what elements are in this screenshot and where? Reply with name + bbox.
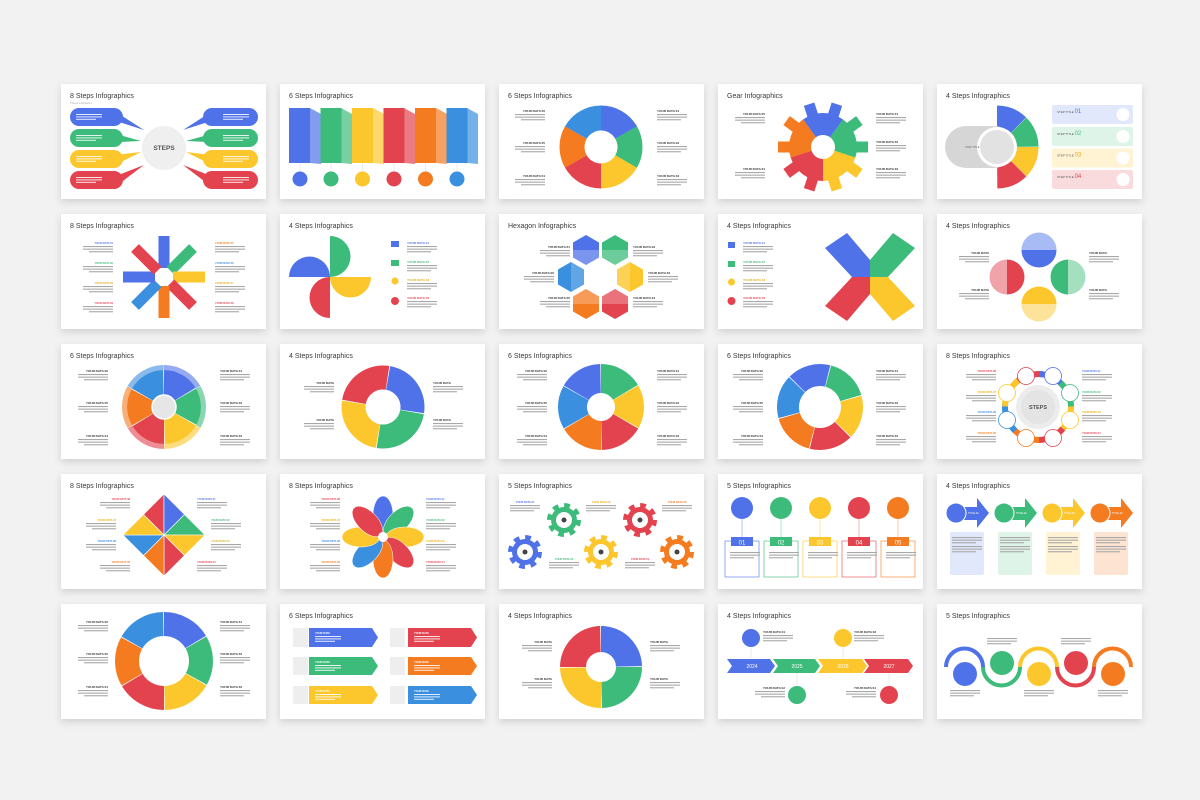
arrows: TITLE 03 — [1064, 511, 1075, 515]
slide 5: 4 steps semicircle with step titles — [937, 84, 1142, 199]
labels: YOUR DATA 04 — [523, 174, 545, 178]
timeline arrows: 2026 — [837, 664, 849, 670]
slide 21: 6 steps ring (no title) — [61, 604, 266, 719]
circles — [990, 232, 1086, 322]
slide 6: 8 steps star bars — [61, 214, 266, 329]
labels: YOUR DATA 01 — [220, 620, 242, 624]
labels: YOUR DATA 05 — [668, 500, 687, 504]
title: 4 Steps Infographics — [508, 613, 572, 620]
numbered boxes: 03 — [817, 540, 824, 546]
labels: YOUR DATA 02 — [1082, 390, 1101, 394]
numbered boxes: 02 — [778, 540, 785, 546]
title: 6 Steps Infographics — [508, 353, 572, 360]
X chart — [825, 233, 915, 321]
step cards: STEP TITLE 04 — [1057, 174, 1082, 180]
labels: YOUR DATA 01 — [516, 500, 535, 504]
labels: YOUR DATA 05 — [111, 560, 131, 564]
labels: YOUR DATA 06 — [97, 539, 117, 543]
labels: YOUR DATA 01 — [763, 630, 785, 634]
slide 15: 8 steps ring with circles — [937, 344, 1142, 459]
labels: YOUR DATA 02 — [876, 140, 898, 144]
numbered boxes: 01 — [739, 540, 746, 546]
shutter ring — [562, 368, 640, 446]
numbered boxes — [725, 537, 915, 577]
labels: YOUR DATA 01 — [876, 112, 898, 116]
labels: YOUR DATA 01 — [426, 497, 445, 501]
labels: YOUR DATA — [971, 288, 990, 292]
labels: YOUR DATA 04 — [741, 434, 763, 438]
labels — [755, 630, 884, 697]
title: 6 Steps Infographics — [289, 613, 353, 620]
slide 19: 5 steps circles with numbered boxes — [718, 474, 923, 589]
center circle — [142, 126, 186, 170]
labels: YOUR DATA 04 — [197, 560, 216, 564]
slide 16: 8 steps diamond — [61, 474, 266, 589]
labels — [310, 497, 456, 571]
slide 4: gear infographics — [718, 84, 923, 199]
wave — [946, 648, 1131, 686]
labels: YOUR DATA 08 — [215, 301, 234, 305]
labels: YOUR DATA 01 — [657, 369, 679, 373]
slide 23: 4 steps ring — [499, 604, 704, 719]
title: 4 Steps Infographics — [946, 93, 1010, 100]
labels: YOUR DATA — [971, 251, 990, 255]
labels: YOUR DATA 01 — [657, 109, 679, 113]
labels: YOUR DATA 01 — [1082, 369, 1101, 373]
hexagons — [558, 235, 643, 319]
labels: YOUR DATA 01 — [94, 241, 114, 245]
labels: YOUR DATA 06 — [525, 369, 547, 373]
list: YOUR DATA 01 — [407, 241, 429, 245]
labels — [733, 369, 906, 445]
banners: YOUR DATA — [414, 631, 429, 635]
labels: YOUR DATA 05 — [525, 401, 547, 405]
labels: YOUR DATA 03 — [657, 174, 679, 178]
title: 6 Steps Infographics — [727, 353, 791, 360]
title: 8 Steps Infographics — [70, 93, 134, 100]
labels: YOUR DATA — [1089, 288, 1108, 292]
labels — [735, 112, 906, 178]
labels: YOUR DATA 02 — [426, 518, 445, 522]
ring segments — [991, 360, 1085, 454]
labels: YOUR DATA 07 — [977, 390, 997, 394]
labels: YOUR DATA 04 — [86, 434, 108, 438]
title: 8 Steps Infographics — [70, 483, 134, 490]
labels: YOUR DATA 04 — [854, 686, 876, 690]
right bubbles — [183, 108, 258, 189]
ring chart — [561, 107, 641, 187]
slide 14: 6 steps ring — [718, 344, 923, 459]
title: 6 Steps Infographics — [70, 353, 134, 360]
step cards: STEP TITLE 02 — [1057, 131, 1082, 137]
banners: YOUR DATA — [414, 660, 429, 664]
labels: YOUR DATA 06 — [86, 620, 108, 624]
labels: YOUR DATA — [534, 677, 553, 681]
title: 4 Steps Infographics — [727, 223, 791, 230]
list: YOUR DATA 02 — [743, 260, 765, 264]
labels: YOUR DATA — [316, 418, 335, 422]
labels: YOUR DATA — [1089, 251, 1108, 255]
slide 3: 6 steps puzzle ring — [499, 84, 704, 199]
labels: YOUR DATA 05 — [977, 431, 997, 435]
labels: YOUR DATA 02 — [657, 141, 679, 145]
list: YOUR DATA 03 — [407, 278, 429, 282]
center circle: STEPS — [153, 145, 175, 152]
list — [728, 241, 773, 307]
labels: YOUR DATA 04 — [633, 296, 655, 300]
labels: YOUR DATA 03 — [876, 434, 898, 438]
labels: YOUR DATA 01 — [876, 369, 898, 373]
labels: YOUR DATA 02 — [555, 557, 574, 561]
step cards — [1052, 105, 1133, 189]
labels: YOUR DATA 02 — [633, 245, 655, 249]
step cards: STEP TITLE 03 — [1057, 152, 1082, 158]
list — [391, 241, 437, 307]
gray pill: STEP TITLE — [965, 145, 980, 149]
star bars — [123, 236, 205, 318]
step circles — [292, 163, 464, 186]
labels: YOUR DATA 04 — [525, 434, 547, 438]
labels: YOUR DATA 04 — [743, 167, 765, 171]
pinwheel — [289, 236, 371, 318]
banners: YOUR DATA — [315, 660, 330, 664]
list: YOUR DATA 02 — [407, 260, 429, 264]
labels: YOUR DATA 05 — [321, 560, 341, 564]
step circles — [953, 651, 1125, 686]
title: 4 Steps Infographics — [289, 223, 353, 230]
labels: YOUR DATA — [650, 677, 669, 681]
arrows — [946, 498, 1133, 528]
labels: YOUR DATA 01 — [220, 369, 242, 373]
title: 8 Steps Infographics — [289, 483, 353, 490]
labels — [522, 640, 680, 688]
slide 1: 8 steps speech bubbles — [61, 84, 266, 199]
step cards: STEP TITLE 01 — [1057, 109, 1082, 115]
labels — [304, 381, 463, 429]
slide 1: 8 steps speech bubbles: 8 Steps Infographics — [70, 102, 93, 105]
labels: YOUR DATA 02 — [657, 401, 679, 405]
labels: YOUR DATA 04 — [86, 685, 108, 689]
pie chart — [110, 353, 218, 461]
labels: YOUR DATA 05 — [743, 112, 765, 116]
step circles — [998, 368, 1078, 446]
banners — [289, 108, 478, 164]
labels: YOUR DATA 06 — [977, 410, 997, 414]
labels: YOUR DATA 07 — [321, 518, 341, 522]
labels: YOUR DATA 06 — [86, 369, 108, 373]
gears — [511, 506, 691, 566]
timeline arrows — [727, 659, 913, 673]
title: 8 Steps Infographics — [946, 353, 1010, 360]
labels: YOUR DATA 04 — [94, 301, 114, 305]
gear — [778, 103, 868, 191]
labels — [78, 620, 250, 696]
labels: YOUR DATA 07 — [215, 281, 234, 285]
labels: YOUR DATA — [534, 640, 553, 644]
labels: YOUR DATA 02 — [220, 401, 242, 405]
labels: YOUR DATA 02 — [211, 518, 230, 522]
labels: YOUR DATA 03 — [220, 434, 242, 438]
title: 8 Steps Infographics — [70, 223, 134, 230]
timeline arrows: 2025 — [791, 664, 803, 670]
labels: YOUR DATA 02 — [876, 401, 898, 405]
labels — [959, 251, 1119, 299]
numbered boxes: 05 — [895, 540, 902, 546]
labels — [515, 109, 687, 185]
timeline arrows: 2024 — [746, 664, 758, 670]
labels: YOUR DATA 03 — [94, 281, 114, 285]
labels: YOUR DATA 04 — [1082, 431, 1101, 435]
slide 22: 6 steps arrow banners — [280, 604, 485, 719]
labels: YOUR DATA 03 — [657, 434, 679, 438]
labels: YOUR DATA 06 — [523, 109, 545, 113]
flower — [342, 496, 424, 578]
labels: YOUR DATA 03 — [211, 539, 230, 543]
title: 6 Steps Infographics — [289, 93, 353, 100]
labels: YOUR DATA 07 — [97, 518, 117, 522]
labels: YOUR DATA 08 — [977, 369, 997, 373]
slide 2: 6 steps folded banners — [280, 84, 485, 199]
labels — [83, 241, 245, 312]
list: YOUR DATA 04 — [407, 296, 429, 300]
title: 4 Steps Infographics — [289, 353, 353, 360]
arrows: TITLE 04 — [1112, 511, 1123, 515]
banners: YOUR DATA — [315, 689, 330, 693]
labels: YOUR DATA 06 — [215, 261, 234, 265]
donut — [349, 373, 417, 441]
labels — [78, 369, 250, 445]
semicircle — [968, 118, 1026, 176]
labels — [524, 245, 678, 307]
center STEPS: STEPS — [1029, 405, 1047, 411]
title: 5 Steps Infographics — [946, 613, 1010, 620]
title: 6 Steps Infographics — [508, 93, 572, 100]
banners: YOUR DATA — [315, 631, 330, 635]
slide 13: 6 steps shutter — [499, 344, 704, 459]
list: YOUR DATA 01 — [743, 241, 765, 245]
labels: YOUR DATA 03 — [592, 500, 611, 504]
numbered boxes: 04 — [856, 540, 863, 546]
labels: YOUR DATA 03 — [854, 630, 876, 634]
labels: YOUR DATA 05 — [523, 141, 545, 145]
labels: YOUR DATA — [316, 381, 335, 385]
slide 18: 5 steps gears — [499, 474, 704, 589]
labels: YOUR DATA 03 — [876, 167, 898, 171]
ring — [113, 610, 215, 712]
slide 12: 4 steps donut — [280, 344, 485, 459]
labels: YOUR DATA — [650, 640, 669, 644]
texts — [950, 638, 1128, 696]
ring — [573, 639, 629, 695]
diamond — [123, 494, 205, 576]
title: 4 Steps Infographics — [727, 613, 791, 620]
slide 17: 8 steps flower — [280, 474, 485, 589]
title: Gear Infographics — [727, 93, 783, 100]
labels: YOUR DATA 05 — [215, 241, 234, 245]
labels: YOUR DATA 05 — [86, 652, 108, 656]
slide 10: 4 steps split circles — [937, 214, 1142, 329]
center STEPS — [1016, 385, 1060, 429]
labels: YOUR DATA 03 — [648, 271, 670, 275]
slide 20: 4 steps arrows — [937, 474, 1142, 589]
banners: YOUR DATA — [414, 689, 429, 693]
labels: YOUR DATA — [433, 418, 452, 422]
labels: YOUR DATA — [433, 381, 452, 385]
slide 7: 4 steps pinwheel — [280, 214, 485, 329]
cards — [950, 532, 1128, 575]
gray pill — [945, 126, 1017, 168]
labels: YOUR DATA 03 — [426, 539, 445, 543]
step circles — [731, 497, 909, 537]
labels: YOUR DATA 03 — [1082, 410, 1101, 414]
slide 9: 4 steps X shape — [718, 214, 923, 329]
ring — [775, 362, 865, 452]
slide 25: 5 steps wave — [937, 604, 1142, 719]
labels: YOUR DATA 01 — [548, 245, 570, 249]
slide 11: 6 steps pie — [61, 344, 266, 461]
labels: YOUR DATA 03 — [220, 685, 242, 689]
labels: YOUR DATA 02 — [94, 261, 114, 265]
labels: YOUR DATA 04 — [426, 560, 445, 564]
left bubbles — [70, 108, 144, 189]
labels: YOUR DATA 02 — [763, 686, 785, 690]
banners — [293, 628, 477, 704]
labels — [86, 497, 241, 571]
title: 4 Steps Infographics — [946, 223, 1010, 230]
labels: YOUR DATA 06 — [532, 271, 554, 275]
title: 5 Steps Infographics — [508, 483, 572, 490]
labels: YOUR DATA 06 — [321, 539, 341, 543]
labels: YOUR DATA 01 — [197, 497, 216, 501]
labels: YOUR DATA 02 — [220, 652, 242, 656]
list: YOUR DATA 03 — [743, 278, 765, 282]
labels: YOUR DATA 04 — [631, 557, 650, 561]
slide 24: 4 steps timeline — [718, 604, 923, 719]
arrows: TITLE 02 — [1016, 511, 1027, 515]
list: YOUR DATA 04 — [743, 296, 765, 300]
title: Hexagon Infographics — [508, 223, 577, 230]
slide 8: hexagon infographics — [499, 214, 704, 329]
arrows: TITLE 01 — [968, 511, 979, 515]
labels: YOUR DATA 08 — [321, 497, 341, 501]
labels: YOUR DATA 05 — [548, 296, 570, 300]
labels — [966, 369, 1112, 442]
labels — [517, 369, 687, 445]
title: 4 Steps Infographics — [946, 483, 1010, 490]
labels: YOUR DATA 05 — [86, 401, 108, 405]
labels: YOUR DATA 05 — [741, 401, 763, 405]
labels — [510, 500, 692, 568]
timeline arrows: 2027 — [883, 664, 895, 670]
title: 5 Steps Infographics — [727, 483, 791, 490]
milestones — [742, 629, 898, 704]
labels: YOUR DATA 06 — [741, 369, 763, 373]
labels: YOUR DATA 08 — [111, 497, 131, 501]
